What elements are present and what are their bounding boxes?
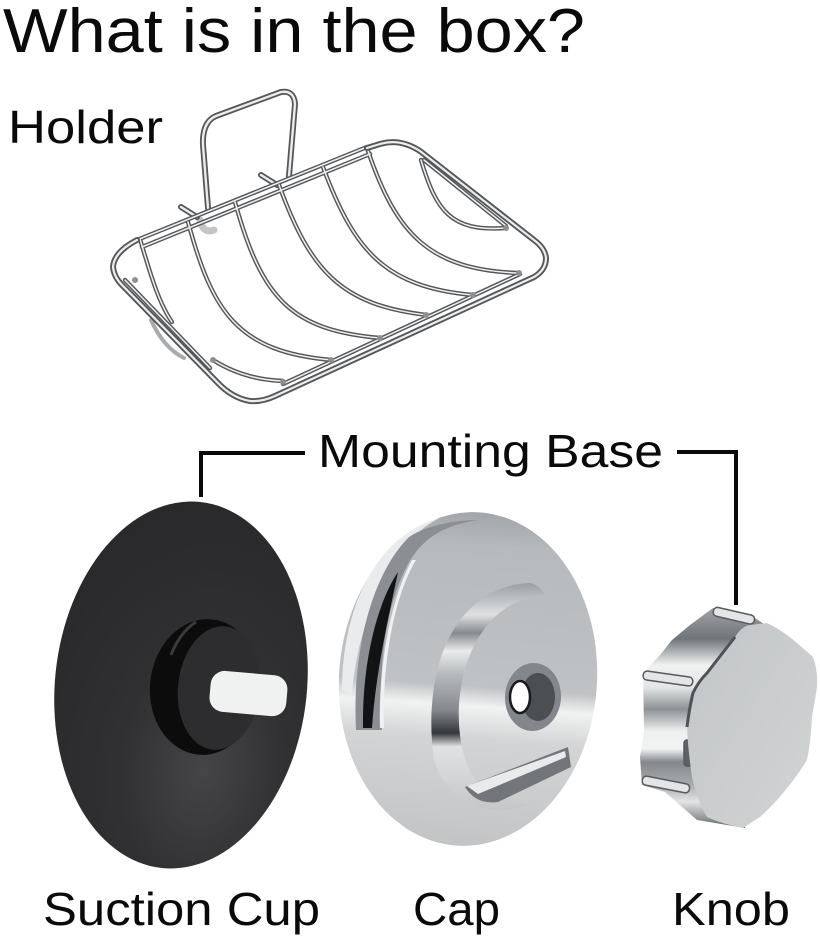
cap outer ridge highlight xyxy=(342,518,440,695)
cap raised hub crescent xyxy=(431,583,545,810)
holder rivets xyxy=(132,225,522,385)
suction cup peg xyxy=(208,670,289,717)
icon: suction cup xyxy=(36,489,326,881)
icon: chrome cap xyxy=(328,503,608,855)
label: Mounting Base: Mounting Base xyxy=(318,425,663,477)
icon: wire soap holder xyxy=(113,92,546,401)
knob face xyxy=(687,623,817,828)
knob ridges xyxy=(641,607,755,793)
cap centre hole xyxy=(503,661,563,733)
icon: knob xyxy=(640,607,817,828)
cap notch xyxy=(465,747,571,802)
label: Holder: Holder xyxy=(8,101,163,153)
label: Cap: Cap xyxy=(413,883,500,935)
label: Knob: Knob xyxy=(672,883,790,935)
cap outer groove xyxy=(355,520,478,730)
bracket: mounting base left xyxy=(201,453,305,497)
bracket: mounting base right xyxy=(677,452,736,605)
label: Suction Cup: Suction Cup xyxy=(43,883,320,935)
